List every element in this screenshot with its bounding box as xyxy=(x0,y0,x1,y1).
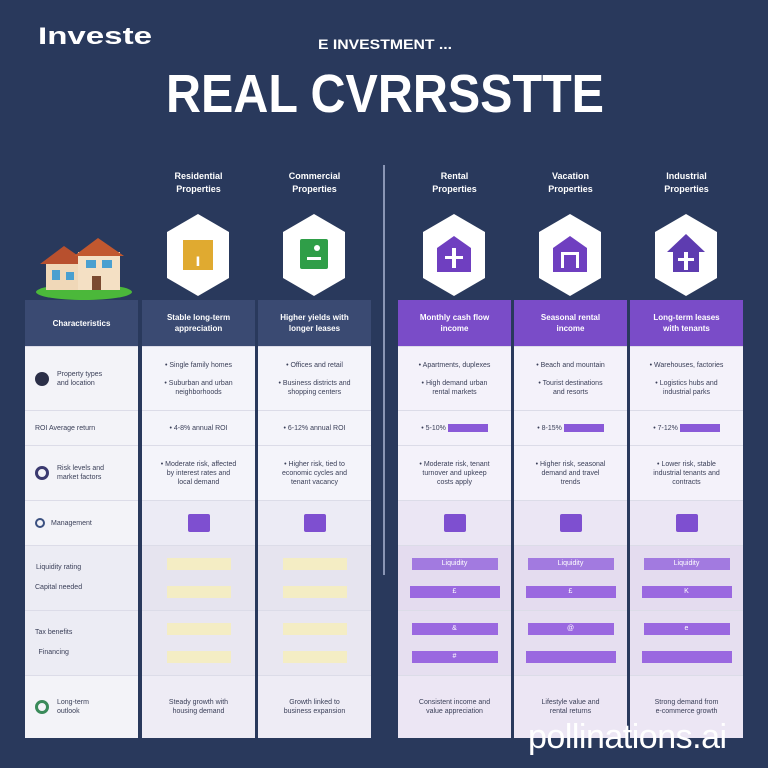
icon: hexagon commercial xyxy=(283,214,345,296)
panel: rental column: Monthly cash flow xyxy=(420,313,489,322)
column titles: Vacation xyxy=(552,171,589,181)
panel: industrial column: Long-term leases xyxy=(653,313,720,322)
column titles xyxy=(174,171,709,194)
panel: row labels xyxy=(25,300,138,738)
panel: rental column: rental markets xyxy=(432,388,477,396)
panel: rental column: • 5-10% xyxy=(421,424,446,432)
panel: vacation column: Seasonal rental xyxy=(541,313,600,322)
panel: commercial column: • 6-12% annual ROI xyxy=(284,424,346,432)
panel: row labels: market factors xyxy=(57,474,101,481)
panel: industrial column: industrial tenants and xyxy=(653,470,720,476)
panel: industrial column: • 7-12% xyxy=(653,424,678,432)
panel: row labels: ROI Average return xyxy=(35,424,95,432)
panel: vacation column: • 8-15% xyxy=(537,424,562,432)
column titles: Commercial xyxy=(289,171,340,181)
panel: row labels: Capital needed xyxy=(35,584,82,591)
panel: industrial column xyxy=(630,300,743,738)
panel: residential column: • 4-8% annual ROI xyxy=(169,424,228,432)
panel: residential column: • Moderate risk, affected xyxy=(161,460,236,468)
panel: rental column: • High demand urban xyxy=(422,380,487,386)
panel: row labels: Property types xyxy=(57,370,102,378)
icon: hexagon vacation xyxy=(539,214,601,296)
panel: commercial column: business expansion xyxy=(284,708,345,715)
icon: house illustration xyxy=(36,238,132,300)
column titles: Rental xyxy=(441,171,468,181)
panel: residential column: Steady growth with xyxy=(169,699,228,706)
panel: industrial column: with tenants xyxy=(663,324,710,333)
panel: rental column: • Moderate risk, tenant xyxy=(419,460,490,468)
panel: residential column: Stable long-term xyxy=(167,313,230,322)
panel: commercial column xyxy=(258,300,371,738)
panel: commercial column: shopping centers xyxy=(288,388,341,396)
panel: residential column: by interest rates and xyxy=(167,470,230,476)
panel: vacation column: £ xyxy=(569,588,572,595)
panel: industrial column: Strong demand from xyxy=(655,699,718,706)
panel: vacation column: • Higher risk, seasonal xyxy=(536,460,605,468)
panel: rental column: Consistent income and xyxy=(419,699,490,706)
divider line xyxy=(383,165,385,575)
panel: vacation column: and resorts xyxy=(553,388,588,396)
panel: vacation column: Liquidity xyxy=(558,560,583,567)
panel: row labels: outlook xyxy=(57,708,80,715)
panel: commercial column: Higher yields with xyxy=(280,313,349,322)
panel: commercial column: • Offices and retail xyxy=(286,362,343,368)
panel: vacation column: income xyxy=(556,324,584,333)
panel: commercial column: longer leases xyxy=(289,324,340,333)
panel: row labels: Liquidity rating xyxy=(36,564,81,571)
column titles: Properties xyxy=(432,184,477,194)
column titles: Residential xyxy=(174,171,222,181)
panel: row labels: Characteristics xyxy=(53,318,110,328)
panel: industrial column: industrial parks xyxy=(663,388,710,396)
panel: rental column: # xyxy=(453,653,456,660)
panel: industrial column: K xyxy=(684,588,689,595)
column titles: Properties xyxy=(292,184,337,194)
panel: rental column: & xyxy=(452,625,457,632)
panel: row labels: Long-term xyxy=(57,699,89,706)
panel: rental column: £ xyxy=(453,588,456,595)
panel: commercial column: Growth linked to xyxy=(289,699,340,706)
column titles: Industrial xyxy=(666,171,707,181)
panel: rental column xyxy=(398,300,511,738)
panel: residential column: appreciation xyxy=(175,324,222,333)
panel: rental column: value appreciation xyxy=(426,708,483,715)
panel: residential column: • Suburban and urban xyxy=(164,380,233,386)
panel: row labels: and location xyxy=(57,380,95,386)
panel: commercial column: economic cycles and xyxy=(282,470,347,476)
panel: row labels: Management xyxy=(51,520,92,526)
panel: row labels: Financing xyxy=(38,649,69,656)
panel: industrial column: Liquidity xyxy=(674,560,699,567)
panel: rental column: turnover and upkeep xyxy=(422,470,487,476)
panel: industrial column: • Logistics hubs and xyxy=(655,380,718,386)
panel: rental column: Liquidity xyxy=(442,560,467,567)
panel: industrial column: e-commerce growth xyxy=(656,708,717,715)
panel: rental column: income xyxy=(440,324,468,333)
brand label: Investe xyxy=(38,23,152,50)
panel: vacation column: rental returns xyxy=(550,708,591,715)
panel: vacation column: • Beach and mountain xyxy=(536,362,605,368)
panel: vacation column: trends xyxy=(561,478,580,486)
column titles: Properties xyxy=(664,184,709,194)
panel: residential column: local demand xyxy=(178,478,219,486)
column titles: Properties xyxy=(548,184,593,194)
icon: hexagon residential xyxy=(167,214,229,296)
subtitle: E INVESTMENT ... xyxy=(318,36,452,52)
icon: hexagon industrial xyxy=(655,214,717,296)
panel: industrial column: e xyxy=(685,625,688,632)
icon: hexagon residential: ╻ xyxy=(193,249,203,266)
icon: hexagon rental xyxy=(423,214,485,296)
panel: vacation column: • Tourist destinations xyxy=(538,380,603,386)
watermark: pollinations.ai xyxy=(528,718,727,756)
panel: row labels: Risk levels and xyxy=(57,465,104,472)
panel: industrial column: • Lower risk, stable xyxy=(657,460,716,468)
panel: commercial column: tenant vacancy xyxy=(291,478,338,486)
panel: vacation column: demand and travel xyxy=(542,470,599,476)
panel: rental column: • Apartments, duplexes xyxy=(419,362,490,368)
panel: vacation column: Lifestyle value and xyxy=(542,699,599,706)
panel: row labels: Tax benefits xyxy=(35,629,72,636)
panel: industrial column: • Warehouses, factories xyxy=(650,362,723,368)
panel: residential column: neighborhoods xyxy=(175,388,222,396)
panel: commercial column: • Business districts and xyxy=(278,380,351,386)
panel: vacation column: @ xyxy=(567,625,574,632)
panel: residential column xyxy=(142,300,255,738)
panel: rental column: costs apply xyxy=(437,478,472,486)
panel: residential column: • Single family homes xyxy=(165,362,232,368)
panel: vacation column xyxy=(514,300,627,738)
panel: residential column: housing demand xyxy=(173,708,224,715)
panel: industrial column: contracts xyxy=(672,478,701,486)
column titles: Properties xyxy=(176,184,221,194)
panel: commercial column: • Higher risk, tied to xyxy=(284,460,345,468)
